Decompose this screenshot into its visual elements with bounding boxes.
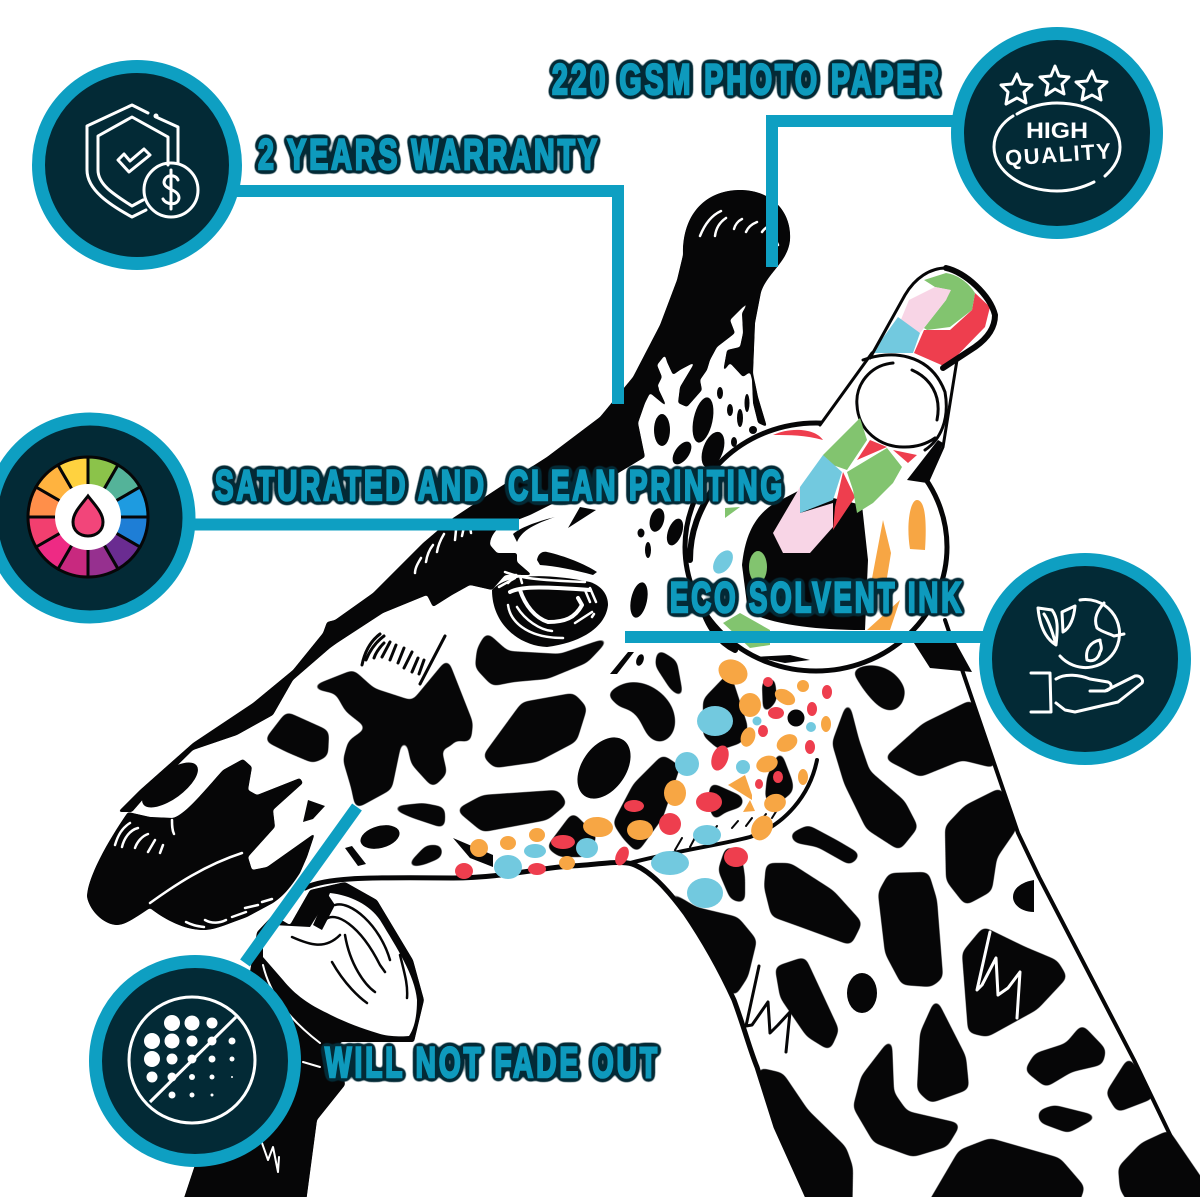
colourful spots: [455, 655, 832, 908]
jaw and neck contour lines: [305, 620, 1200, 1198]
head spots: [267, 652, 903, 865]
connector: warranty: [235, 191, 618, 404]
seal text: HIGH: [1026, 118, 1088, 143]
ridge white ticks: [415, 526, 471, 573]
badge: warranty: [38, 66, 236, 264]
sphere dark centre: [742, 490, 868, 630]
badge: colour wheel: [0, 419, 189, 617]
icon: fading halftone crossed out: [129, 997, 255, 1123]
connector: photo paper: [772, 121, 955, 267]
icon: globe, leaves and hand: [1031, 600, 1143, 712]
head hatching: [362, 634, 445, 684]
lower ear: [175, 882, 424, 1200]
ear with the painted sphere: [685, 268, 995, 672]
icon: three stars: [1001, 66, 1107, 104]
icon: shield with coin: [87, 105, 198, 217]
badge: will not fade: [96, 962, 294, 1160]
heading: 2 years warranty: 2 YEARS WARRANTY: [258, 131, 600, 179]
under-eye swoosh spot: [477, 635, 606, 684]
icon: quality seal ellipse: [994, 103, 1120, 191]
horn cap: [870, 268, 995, 368]
giraffe illustration: [87, 190, 1200, 1200]
connector: eco solvent ink: [625, 631, 985, 643]
muzzle white details: [115, 820, 272, 927]
eye: [492, 572, 608, 647]
neck spots: [650, 702, 1200, 1200]
paint patches: [823, 418, 867, 470]
horn and forehead ridge: [118, 190, 790, 812]
heading: saturated and clean printing: SATURATED AND CLEAN PRINTING: [215, 462, 785, 510]
heading: will not fade out: WILL NOT FADE OUT: [325, 1039, 660, 1087]
badge: high quality: [958, 34, 1156, 232]
eyebrow spikes: [513, 507, 597, 575]
horn highlight strokes: [700, 211, 778, 245]
horn base circle: [856, 363, 940, 447]
icon: colour wheel with ink drop: [28, 457, 148, 577]
small neck spots and lightning marks: [746, 880, 1034, 1052]
badge: eco solvent: [986, 560, 1184, 758]
horn shaft: [800, 353, 957, 505]
connector: will not fade: [245, 807, 357, 963]
muzzle: [87, 759, 315, 930]
snout oval spot: [135, 754, 205, 816]
heading: 220 gsm photo paper: 220 GSM PHOTO PAPER: [552, 56, 942, 104]
heading: eco solvent ink: ECO SOLVENT INK: [670, 574, 964, 622]
mottled spots by the horn base: [627, 387, 757, 667]
seal text: QUALITY: [1004, 138, 1112, 171]
connector: saturated printing: [190, 518, 519, 530]
small head spots: [303, 652, 804, 867]
